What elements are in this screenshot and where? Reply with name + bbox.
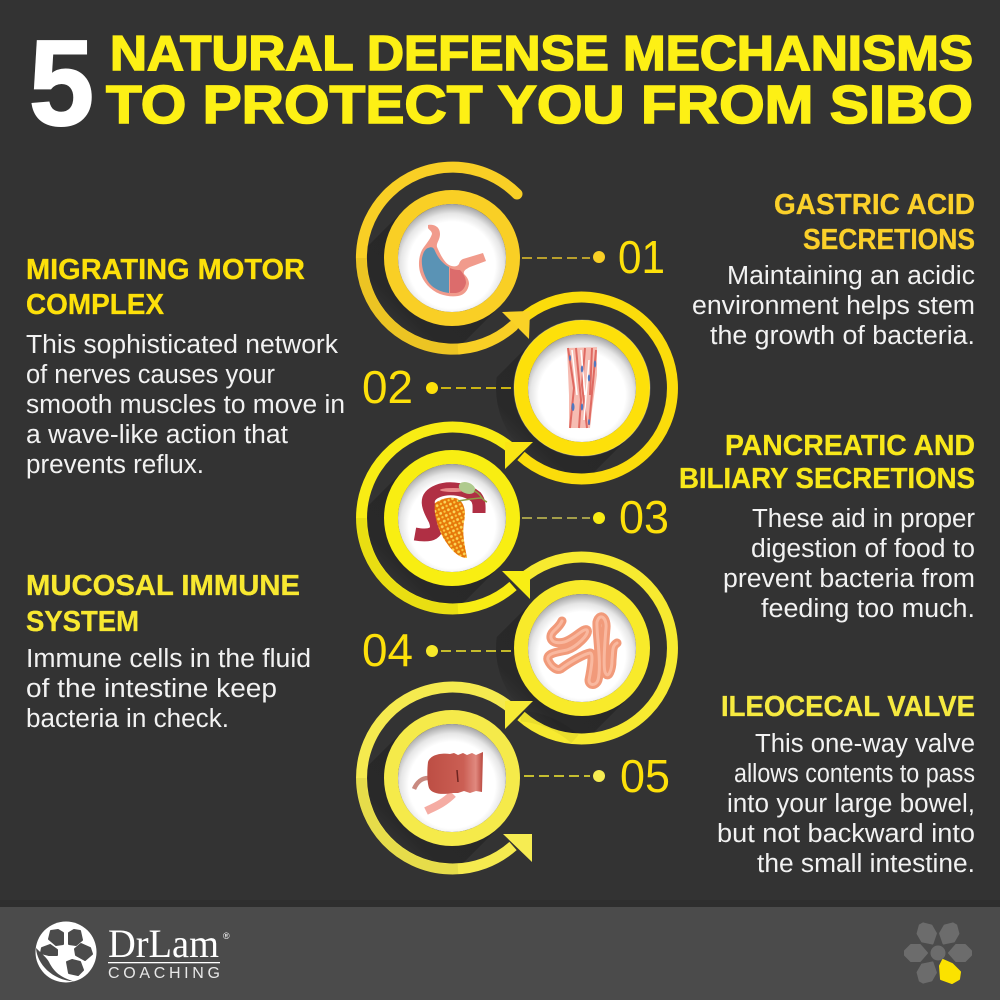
heading: MIGRATING MOTOR bbox=[26, 254, 305, 286]
body: This sophisticated network bbox=[26, 331, 338, 359]
body: the small intestine. bbox=[757, 850, 975, 878]
footer bar bbox=[0, 900, 1000, 1000]
logo: DrLam wordmark: DrLam bbox=[108, 921, 219, 966]
icon: pancreas bbox=[415, 480, 487, 558]
logo: DrLam wordmark: COACHING bbox=[108, 965, 220, 982]
title numeral 5: 5 bbox=[29, 15, 94, 151]
body bbox=[26, 331, 345, 479]
body bbox=[717, 730, 975, 878]
number 01: 01 bbox=[618, 231, 665, 283]
text block: migrating motor complex bbox=[26, 254, 345, 479]
text block: ileocecal valve bbox=[717, 691, 975, 878]
text block: pancreatic and biliary secretions bbox=[679, 430, 976, 623]
body: of the intestine keep bbox=[26, 675, 277, 703]
icon: stomach bbox=[419, 225, 486, 296]
heading: PANCREATIC AND bbox=[725, 430, 975, 462]
step 2 circle and arrow bbox=[505, 297, 672, 479]
heading: GASTRIC ACID bbox=[774, 189, 975, 221]
body: prevent bacteria from bbox=[723, 565, 975, 593]
connector 04 bbox=[362, 624, 513, 676]
body: smooth muscles to move in bbox=[26, 391, 345, 419]
body: of nerves causes your bbox=[26, 361, 275, 389]
body bbox=[723, 505, 976, 623]
body: allows contents to pass bbox=[734, 760, 975, 788]
title line 2: TO PROTECT YOU FROM SIBO bbox=[106, 75, 973, 135]
heading bbox=[679, 430, 975, 495]
heading: SYSTEM bbox=[26, 606, 139, 638]
connector 05 bbox=[524, 750, 670, 802]
heading bbox=[26, 570, 300, 638]
body: Maintaining an acidic bbox=[727, 262, 975, 290]
heading bbox=[26, 254, 305, 321]
heading bbox=[774, 189, 975, 256]
icon: small intestine bbox=[548, 617, 617, 684]
body: digestion of food to bbox=[751, 535, 975, 563]
connector 03 bbox=[522, 491, 669, 543]
body: Immune cells in the fluid bbox=[26, 645, 311, 673]
icon: flower with yellow petal bbox=[905, 920, 971, 986]
body: This one-way valve bbox=[755, 730, 975, 758]
body: environment helps stem bbox=[692, 292, 975, 320]
title line 1: NATURAL DEFENSE MECHANISMS bbox=[110, 27, 973, 81]
logo crescent bbox=[36, 948, 74, 982]
logo: DrLam wordmark: ® bbox=[223, 931, 230, 941]
icon: smooth muscle fibres bbox=[567, 347, 597, 428]
text block: mucosal immune system bbox=[26, 570, 311, 733]
number 05: 05 bbox=[620, 750, 670, 802]
body: These aid in proper bbox=[752, 505, 976, 533]
long drop shadows behind the circles bbox=[404, 258, 582, 826]
heading: MUCOSAL IMMUNE bbox=[26, 570, 300, 602]
heading: BILIARY SECRETIONS bbox=[679, 463, 975, 495]
body: the growth of bacteria. bbox=[710, 322, 975, 350]
number 02: 02 bbox=[362, 361, 413, 413]
number 04: 04 bbox=[362, 624, 413, 676]
body: but not backward into bbox=[717, 820, 975, 848]
connector 01 bbox=[522, 231, 665, 283]
connector 02 bbox=[362, 361, 513, 413]
body bbox=[692, 262, 975, 350]
icon: large intestine bbox=[414, 752, 483, 811]
body: prevents reflux. bbox=[26, 451, 204, 479]
body: into your large bowel, bbox=[727, 790, 975, 818]
logo: DrLam wordmark bbox=[108, 921, 230, 982]
step 3 circle and arrow bbox=[361, 427, 530, 609]
title bbox=[29, 15, 973, 151]
step 1 circle and arrow bbox=[361, 167, 530, 349]
number 03: 03 bbox=[619, 491, 669, 543]
body: a wave-like action that bbox=[26, 421, 288, 449]
text block: gastric acid secretions bbox=[692, 189, 975, 350]
heading: COMPLEX bbox=[26, 289, 164, 321]
step 5 circle and arrow bbox=[361, 687, 532, 869]
body: bacteria in check. bbox=[26, 705, 229, 733]
heading: ILEOCECAL VALVE bbox=[721, 691, 975, 723]
heading: SECRETIONS bbox=[803, 224, 975, 256]
body: feeding too much. bbox=[761, 595, 975, 623]
step 4 circle and arrow bbox=[505, 557, 672, 739]
logo: flower emblem bbox=[36, 922, 96, 982]
body bbox=[26, 645, 311, 733]
